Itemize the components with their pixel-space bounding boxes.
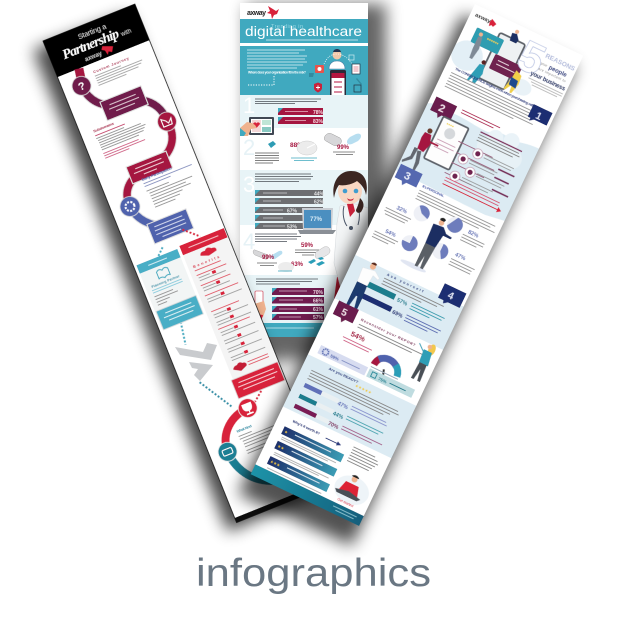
icon: capsules 99%: 99% [337, 145, 350, 151]
logo: axway [475, 14, 496, 27]
header band: Trending in [271, 24, 303, 30]
stat: 54% [342, 327, 377, 353]
intro panel [240, 46, 368, 95]
heading: why [292, 418, 342, 446]
bar chart: section 5: 70% [313, 290, 324, 296]
ribbon path [75, 45, 205, 238]
pie labels: 82% [467, 230, 479, 240]
sheet: digital healthcare infographic (middle) [240, 3, 388, 362]
bubble: 1 [528, 104, 552, 126]
panel: ask yourself band: 57% [396, 298, 408, 308]
panel: section 2 [244, 140, 318, 164]
title band: Starting a [76, 21, 108, 41]
intro panel: Where does your organization fit in the mix? [248, 70, 306, 74]
ribbon stars [267, 429, 340, 494]
pie labels: 47% [454, 252, 466, 262]
panel: left teal option: Planning Partner [151, 274, 181, 289]
bar chart: readiness: 44% [331, 411, 344, 421]
chip: blue stat: 59% [329, 353, 340, 362]
ribbon: bottom [215, 407, 280, 494]
panel: ask yourself band: 69% [391, 310, 403, 320]
ribbon stars: ★★★ [269, 459, 282, 468]
callout box 3 [147, 209, 194, 244]
bubble: 5 [331, 300, 359, 327]
stat: 54%: 54% [349, 329, 367, 344]
logo: axway: axway [474, 12, 492, 25]
footer [251, 464, 364, 526]
illustration: running person [402, 128, 439, 170]
title: 5 reasons: people [547, 65, 568, 79]
logo: axway: axway [247, 10, 266, 17]
step 2 text: Subdomains [93, 122, 115, 134]
title band: Partnership [60, 27, 122, 63]
header band [240, 19, 368, 43]
title: 5 reasons [518, 40, 575, 98]
icon: trophy circle [235, 396, 260, 420]
callout box 1 [100, 86, 148, 121]
final step text: What Next [236, 424, 253, 434]
panel: section 2: 88% [290, 142, 303, 149]
panel: ready band: ★★★★★ [354, 383, 373, 395]
panel: section 5 [244, 275, 338, 323]
illustration: laptop: 77% [310, 217, 323, 223]
text block [347, 447, 381, 473]
panel: section 3: 3 [243, 172, 255, 197]
heading: why: Why's it worth it? [292, 418, 322, 436]
chip: blue stat [317, 345, 368, 376]
step 2 text [93, 111, 152, 159]
panel: blue region [396, 103, 539, 221]
panel: left teal option [136, 249, 203, 330]
gauge chart [370, 354, 404, 382]
panel: section 3 [240, 170, 368, 230]
title band: with [119, 29, 133, 38]
bubble: 3: 3 [402, 170, 412, 183]
icon: teal circle [215, 439, 240, 464]
title band [43, 4, 149, 77]
bar chart: readiness: 47% [336, 401, 349, 411]
panel: section 1 [240, 93, 368, 128]
pie labels [372, 206, 484, 275]
bubble: 4 [437, 283, 467, 311]
step 3 text [141, 159, 201, 208]
panel: section 2: 2 [243, 135, 255, 160]
icon: capsules 99% [324, 133, 361, 154]
sheet: five reasons infographic (right) [238, 4, 583, 546]
title: 5 reasons: your [540, 61, 549, 68]
panel: ask yourself band: Ask yourself [386, 273, 425, 294]
title: 5 reasons: REASONS [544, 54, 575, 73]
pie charts [402, 205, 464, 260]
bar chart: section 5: 66% [313, 298, 324, 304]
icon: grey arrows [175, 343, 217, 381]
pie labels: 32% [395, 205, 408, 216]
panel: ready band: Are you READY? [328, 366, 360, 385]
logo: axway [247, 6, 279, 19]
bar chart: section 5: 57% [313, 315, 324, 321]
title: 5 reasons: 5 [510, 31, 553, 85]
step 2 circle [155, 109, 179, 134]
panel: right red option: Benefits [192, 255, 220, 269]
panel: section 4: 4 [243, 229, 255, 254]
ribbon stars: ★★ [277, 443, 286, 451]
red checklist [197, 262, 265, 361]
step 3 circle [117, 193, 143, 219]
bar chart: section 3: 62% [314, 200, 325, 206]
step 1 text [93, 52, 145, 85]
panel: section 1: 1 [243, 93, 255, 118]
panel: section 4: 99% [262, 255, 275, 261]
panel: ask yourself band [335, 255, 464, 350]
illustration: reviews on phones [451, 28, 532, 96]
heading: personal: It's PERSONAL [422, 184, 446, 199]
panel: section 1: 78% [313, 110, 324, 116]
illustration: laptop [298, 208, 336, 234]
heading: personal [415, 184, 496, 233]
section 2 headings [460, 110, 522, 158]
icon: phone with profile [424, 116, 469, 170]
panel: section 4: 59% [301, 243, 314, 249]
panel: right red option [177, 228, 285, 399]
heading: report [358, 318, 425, 357]
icon: pills [308, 247, 330, 266]
bar chart: section 3 [255, 190, 325, 230]
header band: digital healthcare [245, 24, 362, 39]
bar chart: section 3: 44% [314, 192, 325, 198]
bar chart: section 5: 61% [313, 307, 324, 313]
footer [263, 323, 323, 337]
bar chart: readiness: 70% [327, 421, 339, 431]
step 1 text: Custom Journey [93, 56, 130, 74]
illustration: man in navy [400, 218, 452, 272]
caption: infographics [196, 552, 431, 595]
bubble: 5: 5 [339, 307, 349, 320]
dashed arrows [144, 224, 265, 418]
icon: clipboard and stethoscope [349, 55, 361, 92]
sheet: starting a partnership infographic (left) [33, 4, 328, 532]
bar chart: section 3: 53% [287, 224, 298, 230]
step 1 circle [69, 74, 94, 98]
icon: tablet with hand [240, 117, 276, 148]
bar chart: section 3: 67% [287, 208, 298, 214]
chip: teal stat: 75% [377, 376, 388, 385]
heading: consequence: The CONSEQUENCE begins even when purchasing with [454, 67, 536, 109]
arrow: red [442, 177, 503, 213]
heading: report: Reconsider your REPORT [360, 318, 417, 348]
bottom strip [235, 481, 328, 523]
title: 5 reasons: your business [529, 71, 567, 93]
chip: teal stat [366, 368, 415, 398]
step 3 text: Early Participation [141, 166, 173, 182]
icon: doctor and phone [323, 49, 352, 95]
connector lines and icons [444, 140, 515, 198]
panel: section 4 [244, 234, 319, 272]
bubble: 2 [430, 96, 458, 120]
bubble: 2: 2 [436, 102, 447, 116]
panel: section 4: 63% [291, 262, 304, 268]
heading: consequence [444, 68, 534, 125]
ribbon stars: ★ [283, 429, 289, 435]
illustration: meditating person [329, 469, 374, 512]
illustration: meditating person: Get started [337, 497, 354, 508]
step 1 circle: ? [77, 80, 87, 94]
pie labels: 54% [384, 229, 397, 239]
title band: axway [84, 51, 104, 63]
panel: ready band [283, 354, 416, 458]
illustration: doctor woman [333, 171, 368, 300]
title: 5 reasons: are important to [538, 67, 566, 83]
bubble: 4: 4 [446, 290, 456, 303]
bar chart: readiness [292, 383, 392, 451]
illustration: man in white shirt [345, 259, 385, 313]
callout box 2 [126, 151, 173, 184]
bar chart: section 5 [272, 288, 324, 321]
icon: medical case and shield [309, 65, 362, 92]
bubble: 3 [394, 164, 423, 188]
illustration: woman with blonde hair [405, 339, 438, 382]
final step text [236, 413, 288, 454]
panel: section 1: 83% [313, 119, 324, 125]
ribbons [267, 426, 344, 492]
icon: hand with phone [254, 290, 266, 320]
bubble: 1: 1 [534, 111, 544, 123]
